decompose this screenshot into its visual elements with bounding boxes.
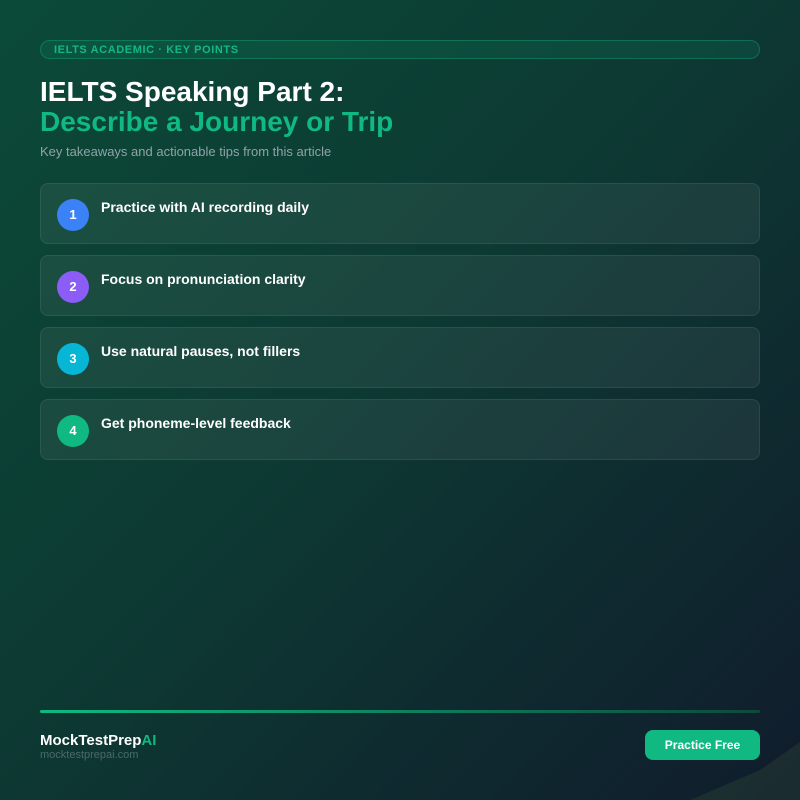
title: IELTS Speaking Part 2:	[40, 76, 344, 107]
card 3	[40, 327, 760, 388]
tag pill: IELTS ACADEMIC · KEY POINTS	[54, 44, 239, 56]
title	[40, 76, 393, 137]
card 4: Get phoneme-level feedback	[101, 415, 291, 431]
title: Describe a Journey or Trip	[40, 106, 393, 137]
card 2: Focus on pronunciation clarity	[101, 271, 306, 287]
tag pill	[40, 40, 760, 59]
brand: MockTestPrepAI	[40, 732, 156, 749]
card 4	[40, 399, 760, 460]
url: mocktestprepai.com	[40, 749, 138, 761]
card 1	[40, 183, 760, 244]
button	[645, 730, 760, 760]
card 1: 1	[69, 207, 77, 222]
card 2: 2	[69, 279, 77, 294]
card 2	[40, 255, 760, 316]
card 3: 3	[69, 351, 77, 366]
card 1: Practice with AI recording daily	[101, 199, 309, 215]
button: Practice Free	[665, 738, 740, 752]
subtitle: Key takeaways and actionable tips from this article	[40, 144, 331, 159]
card 3: Use natural pauses, not fillers	[101, 343, 300, 359]
card 4: 4	[69, 423, 77, 438]
